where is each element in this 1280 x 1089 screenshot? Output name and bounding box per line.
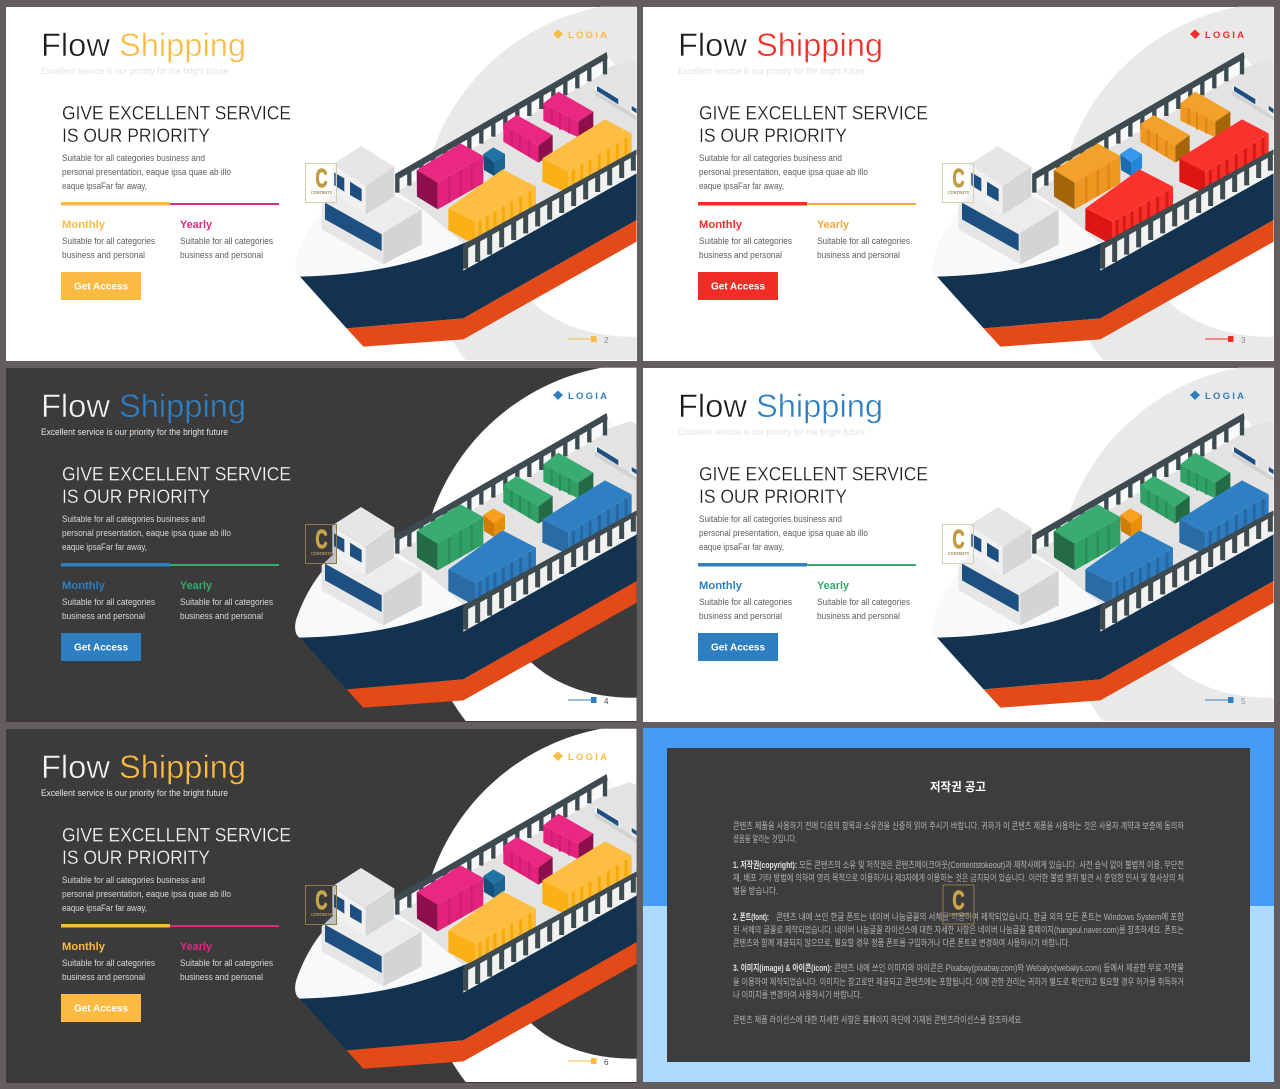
section 3: image and icon: 콘텐츠 내에 쓰인 이미지와 아이콘은 Pixabay(pixabay.com)와 Webalys(webalys.com) 등에서 제공한 무료 저작물 (834, 962, 1184, 973)
ship illustration (295, 7, 637, 360)
column: yearly (180, 580, 273, 621)
description: Suitable for all categories business and (699, 153, 842, 163)
watermark stamp (943, 885, 974, 924)
heading: IS OUR PRIORITY (62, 126, 210, 147)
watermark stamp (942, 524, 974, 564)
button: Get Access (74, 282, 128, 292)
heading: IS OUR PRIORITY (699, 126, 847, 147)
logo: LOGIA (568, 30, 607, 41)
column: monthly: business and personal (699, 611, 782, 621)
heading: GIVE EXCELLENT SERVICE (62, 104, 291, 124)
pager (568, 697, 609, 706)
section 2: font: 2. 폰트(font): (733, 912, 769, 922)
button (698, 272, 778, 300)
section 1: copyright: 1. 저작권(copyright): (733, 859, 797, 870)
watermark stamp: CONTENTS (311, 551, 332, 556)
column: yearly (180, 941, 273, 982)
panel: slide yellow on dark (6, 729, 637, 1083)
column: yearly: Yearly (817, 219, 850, 231)
intro text: 셨음을 알리는 것입니다. (733, 833, 797, 844)
description: Suitable for all categories business and (699, 514, 842, 524)
description: eaque ipsaFar far away, (699, 542, 784, 552)
column: monthly (699, 580, 792, 621)
heading (699, 464, 928, 508)
ship illustration (295, 729, 637, 1082)
panel: slide yellow on white (6, 7, 637, 361)
description: eaque ipsaFar far away, (699, 181, 784, 191)
column: yearly: business and personal (817, 250, 900, 260)
progress bar (61, 563, 279, 566)
description: Suitable for all categories business and (62, 153, 205, 163)
column: monthly: Monthly (62, 219, 106, 231)
column: yearly: Yearly (817, 580, 850, 592)
license note: 콘텐츠 제품 라이선스에 대한 자세한 사항은 홈페이지 하단에 기재된 콘텐츠라이선스를 참조하세요. (733, 1014, 1023, 1025)
section 1: copyright: 모든 콘텐츠의 소유 및 저작권은 콘텐츠메이크아웃(Contentstokeout)과 제작사에게 있습니다. 사전 승낙 없이 불법적 이용, 무단전 (799, 859, 1184, 870)
progress bar (698, 202, 916, 206)
button: Get Access (711, 282, 765, 292)
heading: GIVE EXCELLENT SERVICE (62, 826, 291, 846)
column: yearly (817, 580, 910, 621)
progress bar (61, 202, 279, 206)
panel: copyright notice (643, 728, 1274, 1082)
column: monthly: Monthly (699, 219, 743, 231)
subtitle: Excellent service is our priority for the bright future (41, 788, 228, 798)
column: monthly (62, 580, 155, 621)
heading: GIVE EXCELLENT SERVICE (699, 104, 928, 124)
pager: 5 (1241, 697, 1246, 706)
pager: 4 (604, 697, 609, 706)
column: yearly: Yearly (180, 941, 213, 953)
description (62, 875, 231, 913)
heading (699, 104, 928, 147)
column: yearly: Suitable for all categories (180, 236, 273, 246)
heading: IS OUR PRIORITY (699, 487, 847, 508)
heading: IS OUR PRIORITY (62, 487, 210, 508)
button: Get Access (74, 642, 128, 654)
ship illustration (932, 368, 1274, 721)
watermark stamp: CONTENTS (948, 190, 969, 195)
column: yearly: Yearly (180, 580, 213, 592)
column: monthly: Monthly (62, 941, 106, 953)
column: monthly: Suitable for all categories (699, 597, 792, 607)
column: yearly: Suitable for all categories (817, 236, 910, 246)
pager: 3 (1241, 336, 1246, 345)
description (699, 514, 868, 552)
progress bar (698, 563, 916, 566)
column: yearly: Yearly (180, 219, 213, 231)
column: monthly: business and personal (62, 611, 145, 621)
logo (553, 752, 607, 763)
heading (62, 464, 291, 508)
column: yearly: Suitable for all categories (817, 597, 910, 607)
column: yearly: business and personal (180, 250, 263, 260)
title: Flow Shipping (678, 27, 883, 63)
logo (1190, 30, 1244, 41)
title: Flow Shipping (41, 749, 246, 785)
column: monthly (699, 219, 792, 260)
panel: slide blue on white (643, 368, 1274, 722)
logo: LOGIA (568, 752, 607, 763)
column: monthly (62, 941, 155, 982)
subtitle: Excellent service is our priority for the bright future (41, 66, 228, 76)
pager: 2 (604, 336, 609, 345)
pager (1205, 697, 1246, 706)
subtitle: Excellent service is our priority for the bright future (678, 66, 865, 76)
subtitle: Excellent service is our priority for the bright future (41, 427, 228, 437)
logo (1190, 390, 1244, 402)
description: personal presentation, eaque ipsa quae ab illo (62, 889, 231, 899)
description: Suitable for all categories business and (62, 514, 205, 524)
intro text (733, 820, 1185, 844)
column: yearly (817, 219, 910, 260)
watermark stamp: CONTENTS (948, 551, 969, 556)
logo: LOGIA (1205, 30, 1244, 41)
title: Flow Shipping (41, 388, 246, 424)
description (62, 153, 231, 191)
section 2: font: 콘텐츠 내에 쓰인 한글 폰트는 네이버 나눔글꼴의 서체를 이용하여 제작되었습니다. 한글 외의 모든 폰트는 Windows System에 포함 (776, 911, 1184, 922)
heading: IS OUR PRIORITY (62, 848, 210, 869)
description: personal presentation, eaque ipsa quae ab illo (62, 528, 231, 538)
watermark stamp: CONTENTS (311, 190, 332, 195)
title: Flow Shipping (41, 27, 246, 63)
section 2: font: 콘텐츠와 함께 제공되지 않으므로, 필요할 경우 정품 폰트를 구입하거나 다른 폰트로 변경하여 사용하시기 바랍니다. (733, 937, 1070, 948)
watermark stamp: C (952, 163, 965, 193)
section 1: copyright: 벌을 받습니다. (733, 886, 778, 896)
column: monthly: Monthly (62, 580, 106, 592)
watermark stamp: CONTENTS (311, 912, 332, 917)
description: eaque ipsaFar far away, (62, 181, 147, 191)
pager (568, 1058, 609, 1067)
column: yearly: business and personal (817, 611, 900, 621)
description (699, 153, 868, 191)
progress bar (61, 924, 279, 928)
panel: slide blue on dark (6, 368, 637, 722)
section 2: font (733, 911, 1184, 948)
logo (553, 390, 607, 402)
panel: slide red on white (643, 7, 1274, 361)
description: personal presentation, eaque ipsa quae ab illo (62, 167, 231, 177)
pager: 6 (604, 1058, 609, 1067)
heading: GIVE EXCELLENT SERVICE (699, 464, 928, 486)
column: yearly: business and personal (180, 611, 263, 621)
button (61, 994, 141, 1022)
watermark stamp (306, 885, 336, 924)
section 3: image and icon: 나 이미지를 변경하여 사용하시기 바랍니다. (733, 989, 862, 1000)
column: monthly: Suitable for all categories (699, 236, 792, 246)
button (61, 272, 141, 300)
watermark stamp (942, 163, 974, 202)
section 3: image and icon (733, 962, 1184, 1000)
button: Get Access (74, 1004, 128, 1014)
logo: LOGIA (568, 391, 607, 402)
column: monthly (62, 219, 155, 260)
watermark stamp: C (316, 885, 328, 915)
column: monthly: Suitable for all categories (62, 958, 155, 968)
ship illustration (295, 368, 637, 721)
heading (62, 104, 291, 147)
section 3: image and icon: 3. 이미지(image) & 아이콘(icon): (733, 963, 832, 973)
watermark stamp (306, 524, 336, 564)
watermark stamp: C (952, 524, 965, 554)
button: Get Access (711, 642, 765, 654)
description (62, 514, 231, 552)
pager (568, 336, 609, 345)
description: eaque ipsaFar far away, (62, 542, 147, 552)
logo (553, 30, 607, 41)
heading (62, 826, 291, 869)
description: personal presentation, eaque ipsa quae ab illo (699, 528, 868, 538)
column: yearly: Suitable for all categories (180, 958, 273, 968)
column: monthly: Suitable for all categories (62, 236, 155, 246)
column: monthly: business and personal (699, 250, 782, 260)
column: monthly: business and personal (62, 972, 145, 982)
watermark stamp: C (316, 524, 328, 554)
subtitle: Excellent service is our priority for the bright future (678, 427, 865, 437)
ship illustration (932, 7, 1274, 360)
description: eaque ipsaFar far away, (62, 903, 147, 913)
column: monthly: Monthly (699, 580, 743, 592)
description: Suitable for all categories business and (62, 875, 205, 885)
button (61, 633, 141, 661)
title: Flow Shipping (678, 388, 883, 424)
column: yearly: Suitable for all categories (180, 597, 273, 607)
column: monthly: Suitable for all categories (62, 597, 155, 607)
column: yearly (180, 219, 273, 260)
logo: LOGIA (1205, 391, 1244, 402)
heading: GIVE EXCELLENT SERVICE (62, 464, 291, 486)
column: yearly: business and personal (180, 972, 263, 982)
pager (1205, 336, 1246, 345)
notice title: 저작권 공고 (930, 779, 986, 794)
watermark stamp (306, 163, 336, 202)
watermark stamp: C (952, 885, 965, 915)
watermark stamp: CONTENTS (948, 912, 970, 917)
button (698, 633, 778, 661)
watermark stamp: C (316, 163, 328, 193)
column: monthly: business and personal (62, 250, 145, 260)
section 1: copyright (733, 859, 1184, 896)
description: personal presentation, eaque ipsa quae ab illo (699, 167, 868, 177)
